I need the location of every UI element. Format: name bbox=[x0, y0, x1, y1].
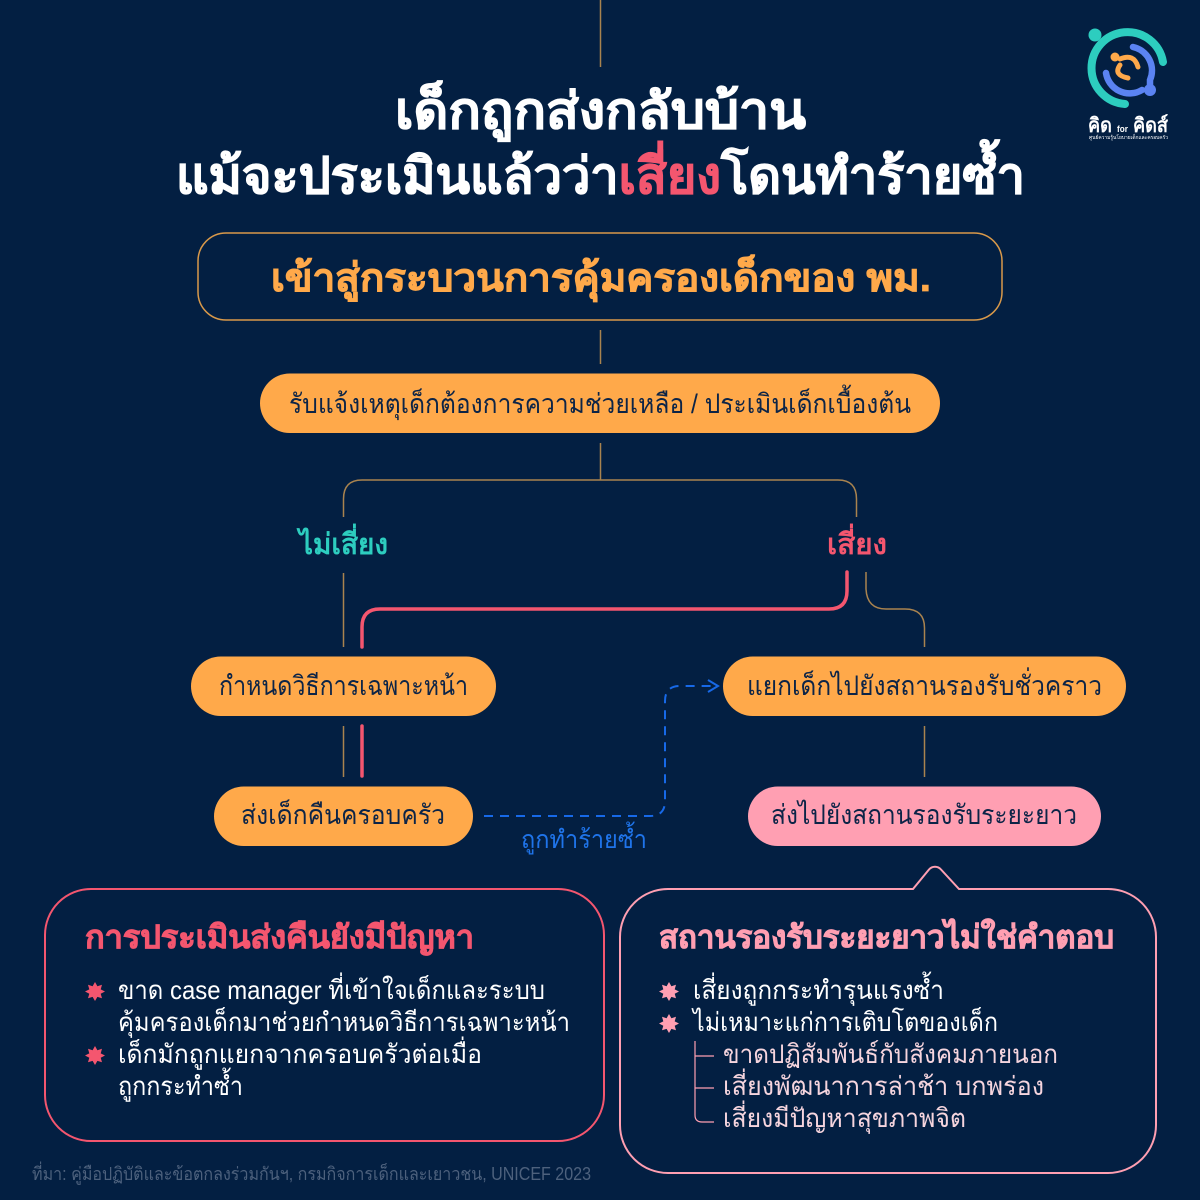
logo: คิด for คิดส์ bbox=[1088, 114, 1169, 137]
list text bbox=[691, 971, 998, 1037]
connector: risk to plan, pink bbox=[362, 572, 847, 647]
panel: return assessment problems bbox=[45, 889, 604, 1141]
step: plan bbox=[191, 656, 496, 716]
step: return to family bbox=[214, 786, 473, 846]
connector: no risk down bbox=[342, 573, 344, 647]
panel: long-term shelter is not the answer bbox=[620, 867, 1156, 1173]
logo bbox=[1088, 28, 1169, 141]
step: plan: กำหนดวิธีการเฉพาะหน้า bbox=[219, 671, 468, 701]
list text: คุ้มครองเด็กมาช่วยกำหนดวิธีการเฉพาะหน้า bbox=[118, 1006, 570, 1038]
title: แม้จะประเมินแล้วว่าเสี่ยงโดนทำร้ายซ้ำ bbox=[176, 139, 1025, 204]
panel heading: การประเมินส่งคืนยังมีปัญหา bbox=[85, 919, 474, 956]
star bullets bbox=[659, 982, 679, 1033]
connector: plan to return bbox=[344, 726, 362, 777]
connector: top line bbox=[600, 0, 602, 67]
sub-list text: เสี่ยงมีปัญหาสุขภาพจิต bbox=[723, 1100, 966, 1134]
connector: temporary to long-term bbox=[924, 726, 926, 777]
source note: ที่มา: คู่มือปฏิบัติและข้อตกลงร่วมกันฯ, กรมกิจการเด็กและเยาวชน, UNICEF 2023 bbox=[32, 1161, 591, 1185]
panel heading: สถานรองรับระยะยาวไม่ใช่คำตอบ bbox=[659, 918, 1114, 955]
connector: branch to risk labels bbox=[344, 443, 856, 517]
sub-list text: เสี่ยงพัฒนาการล่าช้า บกพร่อง bbox=[723, 1068, 1044, 1101]
list text: เสี่ยงถูกกระทำรุนแรงซ้ำ bbox=[693, 971, 944, 1006]
list text: ไม่เหมาะแก่การเติบโตของเด็ก bbox=[691, 1006, 998, 1037]
connector: heading to intake bbox=[600, 330, 602, 364]
sub-list text: ขาดปฏิสัมพันธ์กับสังคมภายนอก bbox=[723, 1039, 1058, 1069]
logo: ศูนย์ความรู้นโยบายเด็กและครอบครัว bbox=[1089, 133, 1168, 141]
title: เด็กถูกส่งกลับบ้าน bbox=[395, 80, 806, 142]
step: intake: รับแจ้งเหตุเด็กต้องการความช่วยเหลือ / ประเมินเด็กเบื้องต้น bbox=[289, 384, 911, 421]
label: no risk: ไม่เสี่ยง bbox=[296, 523, 388, 561]
panel: process heading bbox=[198, 233, 1002, 320]
sub-list tree lines bbox=[695, 1041, 714, 1122]
step: temporary shelter bbox=[723, 656, 1126, 716]
connector: risk to shelter bbox=[866, 572, 924, 647]
step: intake bbox=[260, 374, 940, 433]
list text: เด็กมักถูกแยกจากครอบครัวต่อเมื่อ bbox=[118, 1036, 482, 1070]
list text bbox=[118, 972, 570, 1102]
star bullets bbox=[85, 982, 105, 1065]
step: return to family: ส่งเด็กคืนครอบครัว bbox=[241, 797, 445, 830]
label: risk: เสี่ยง bbox=[827, 523, 887, 561]
sub-list text bbox=[723, 1039, 1058, 1134]
title bbox=[176, 80, 1025, 204]
arrow: repeat abuse dashed bbox=[484, 680, 718, 816]
step: long-term shelter bbox=[748, 786, 1101, 846]
step: long-term shelter: ส่งไปยังสถานรองรับระยะยาว bbox=[771, 800, 1077, 830]
label: repeat abuse: ถูกทำร้ายซ้ำ bbox=[521, 821, 647, 855]
list text: ถูกกระทำซ้ำ bbox=[118, 1067, 243, 1102]
step: temporary shelter: แยกเด็กไปยังสถานรองรับชั่วคราว bbox=[747, 667, 1102, 701]
list text: ขาด case manager ที่เข้าใจเด็กและระบบ bbox=[118, 972, 545, 1005]
panel: process heading: เข้าสู่กระบวนการคุ้มครองเด็กของ พม. bbox=[271, 254, 931, 302]
